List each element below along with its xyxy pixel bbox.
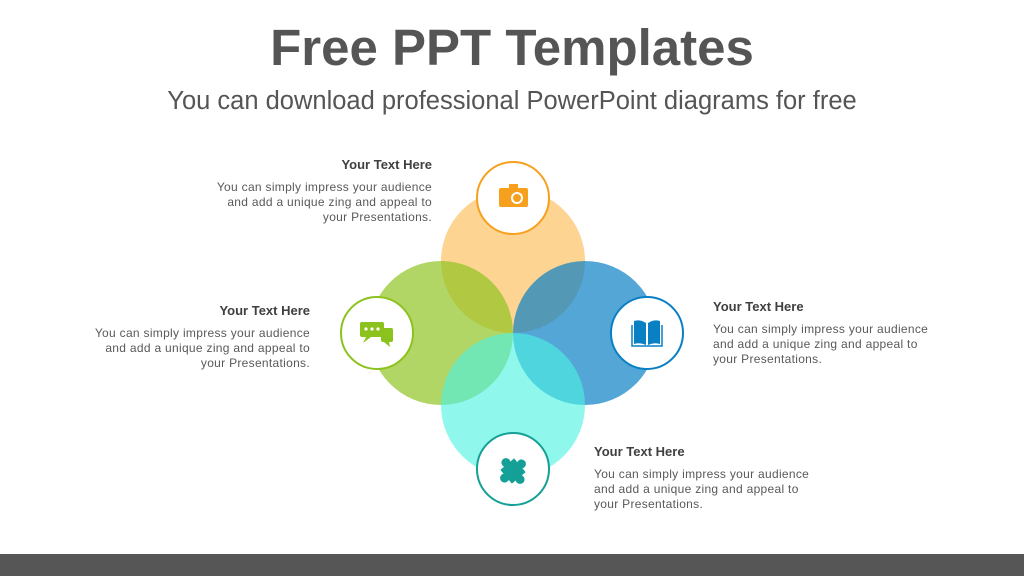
circle: green	[369, 261, 513, 405]
subtitle: You can download professional PowerPoint diagrams for free	[167, 87, 857, 115]
text block: right: You can simply impress your audience and add a unique zing and appeal to your Presentations.	[713, 322, 928, 366]
text block: bottom-right: You can simply impress your audience and add a unique zing and appeal to your Presentations.	[594, 467, 809, 511]
icon: book	[611, 297, 683, 369]
circle: cyan	[441, 333, 585, 477]
text block: right	[713, 299, 928, 366]
icon: chat	[341, 297, 413, 369]
text block: top-left: You can simply impress your audience and add a unique zing and appeal to your Presentations.	[217, 180, 432, 224]
text block: top-left	[217, 157, 432, 224]
text block: left: Your Text Here	[219, 303, 310, 318]
circle: blue	[513, 261, 657, 405]
footer bar	[0, 554, 1024, 576]
text block: bottom-right	[594, 444, 809, 511]
text block: left: You can simply impress your audience and add a unique zing and appeal to your Presentations.	[95, 326, 310, 370]
title: Free PPT Templates	[270, 19, 754, 76]
icon: puzzle	[477, 433, 549, 505]
icon: camera	[477, 162, 549, 234]
text block: right: Your Text Here	[713, 299, 804, 314]
text block: top-left: Your Text Here	[341, 157, 432, 172]
text block: left	[95, 303, 310, 370]
text block: bottom-right: Your Text Here	[594, 444, 685, 459]
circle: orange	[441, 189, 585, 333]
